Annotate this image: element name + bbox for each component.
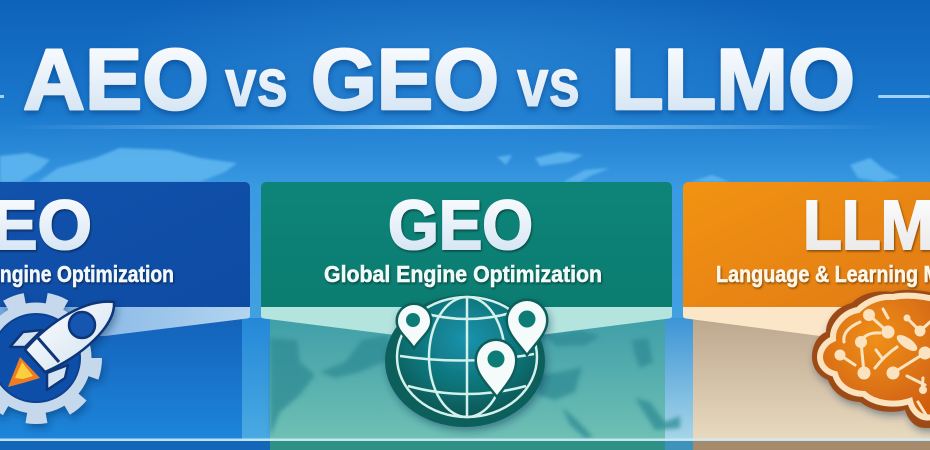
GEO heading: GEO [388, 186, 533, 264]
GEO body [270, 318, 665, 440]
gutter: left [242, 318, 270, 440]
icon: globe with pins [385, 295, 546, 427]
panel: GEO [261, 182, 680, 440]
icon: brain [812, 290, 930, 428]
globe [385, 295, 545, 427]
left title tick [0, 95, 4, 98]
icon: gear with rocket [0, 298, 114, 418]
pin 1 [398, 305, 430, 346]
title: vs [517, 45, 580, 121]
title: vs [225, 45, 288, 121]
pin 2 [508, 301, 546, 353]
bottom strip [0, 441, 930, 450]
GEO header [261, 182, 672, 312]
brain outer [812, 290, 930, 428]
gutter: right [665, 318, 693, 440]
brain fill [820, 296, 930, 418]
map shapes [270, 330, 680, 438]
bottom rule [0, 438, 930, 441]
AEO body [0, 318, 242, 440]
panel: AEO [0, 182, 250, 440]
title: LLMO [611, 32, 855, 128]
gear [0, 298, 96, 418]
panel: LLMO [683, 182, 930, 440]
GEO subtitle: Global Engine Optimization [324, 261, 602, 287]
LLMO header [683, 182, 930, 312]
neural network [840, 309, 930, 418]
rocket [8, 302, 114, 390]
AEO band [0, 307, 250, 336]
title [23, 32, 855, 128]
LLMO body [693, 318, 930, 440]
GEO band [261, 307, 672, 335]
title: AEO [23, 32, 209, 128]
pin 3 [477, 341, 515, 395]
world map silhouettes [0, 148, 900, 182]
LLMO band [683, 307, 930, 336]
title: GEO [311, 32, 499, 128]
AEO header [0, 182, 250, 312]
right title tick [878, 95, 930, 98]
title rule [10, 125, 890, 129]
